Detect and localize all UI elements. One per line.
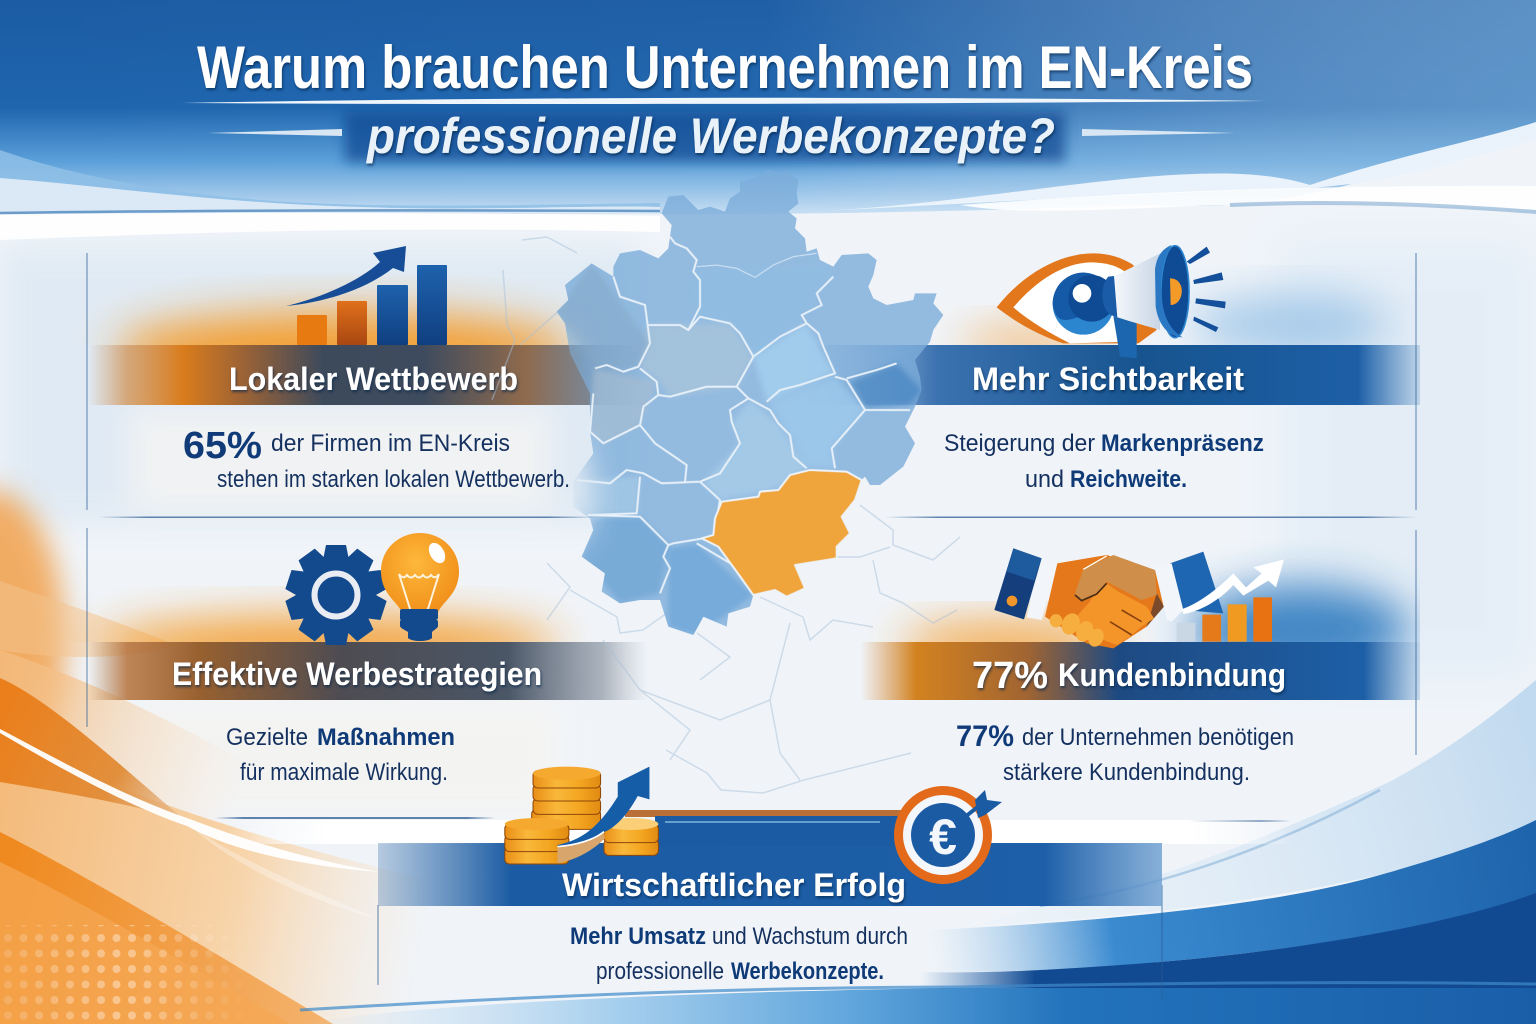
body text: für maximale Wirkung. — [240, 759, 448, 786]
statistic text — [183, 425, 570, 493]
statistic text: 65% — [183, 425, 262, 467]
body text: professionelle — [596, 958, 724, 985]
heading band: Effektive Werbestrategien — [88, 642, 648, 700]
panel: Lokaler Wettbewerb — [183, 246, 570, 493]
region borders — [577, 237, 910, 595]
body text: und Wachstum durch — [712, 923, 908, 950]
body text — [944, 430, 1264, 493]
body text — [226, 724, 455, 786]
highlighted EN-Kreis — [702, 470, 862, 597]
heading: Wirtschaftlicher Erfolg — [562, 867, 906, 903]
heading: Lokaler Wettbewerb — [229, 361, 518, 397]
heading: Effektive Werbestrategien — [172, 656, 542, 692]
panel frames — [87, 253, 1416, 1000]
body text: Werbekonzepte. — [731, 958, 884, 985]
panel glows and heading bands — [88, 295, 1420, 700]
body text — [570, 923, 908, 985]
statistic text: der Unternehmen benötigen — [1022, 724, 1294, 751]
title: Warum brauchen Unternehmen im EN-Kreis — [197, 34, 1253, 101]
icon: eye with megaphone — [997, 245, 1226, 358]
heading band: Kundenbindung — [860, 642, 1420, 700]
lower-left orange waves — [0, 490, 440, 1024]
statistic text: stärkere Kundenbindung. — [1003, 759, 1250, 786]
heading: Kundenbindung — [1058, 657, 1286, 693]
body text: Gezielte — [226, 724, 308, 751]
panel: Wirtschaftlicher Erfolg — [225, 767, 1295, 985]
heading: Mehr Sichtbarkeit — [972, 361, 1244, 397]
title — [182, 34, 1266, 164]
heading — [972, 655, 1286, 697]
panel: Mehr Sichtbarkeit — [944, 245, 1264, 493]
heading band — [225, 810, 1295, 906]
panel: Kundenbindung — [956, 548, 1294, 786]
statistic text: stehen im starken lokalen Wettbewerb. — [217, 466, 570, 493]
heading band: Lokaler Wettbewerb — [88, 345, 648, 405]
lower-right blue waves — [300, 680, 1536, 1024]
icon: euro target with dart — [894, 786, 1002, 884]
body text: Markenpräsenz — [1101, 430, 1264, 457]
icon: handshake with growth chart — [994, 548, 1284, 649]
panel: Effektive Werbestrategien — [172, 533, 542, 786]
heading: 77% — [972, 655, 1048, 697]
body text: Steigerung der — [944, 430, 1095, 457]
icon: rising bar chart — [286, 246, 447, 345]
body text: und — [1025, 466, 1064, 493]
statistic text: 77% — [956, 720, 1014, 753]
body text: Mehr Umsatz — [570, 923, 706, 950]
icon: coin stacks with arrow — [505, 767, 658, 864]
heading band: Mehr Sichtbarkeit — [800, 345, 1420, 405]
statistic text: der Firmen im EN-Kreis — [271, 430, 510, 457]
panel tint — [0, 213, 1536, 815]
body text: Reichweite. — [1070, 466, 1187, 493]
title: professionelle Werbekonzepte? — [365, 108, 1055, 164]
icon: euro target with dart: € — [929, 809, 957, 865]
body text: Maßnahmen — [317, 724, 455, 751]
map regions — [556, 170, 944, 635]
map of the region — [492, 160, 960, 793]
statistic text — [956, 720, 1294, 786]
icon: gear and light bulb — [284, 533, 459, 645]
background map lines — [492, 237, 960, 793]
